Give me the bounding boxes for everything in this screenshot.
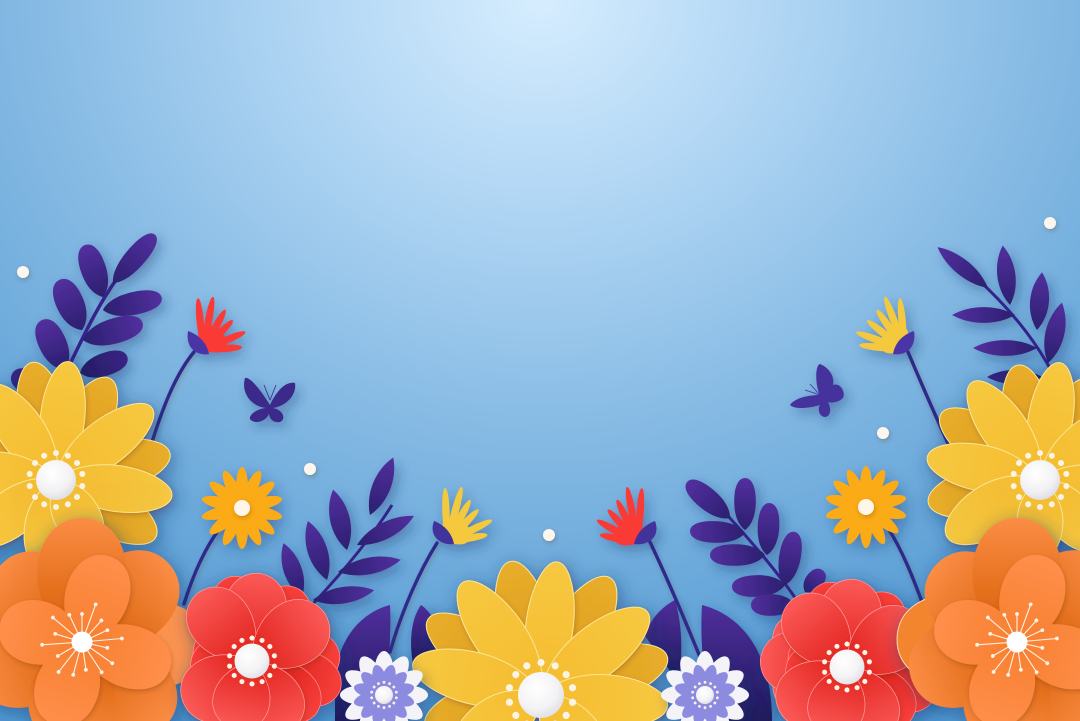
tulip flower: yellow, right	[855, 295, 916, 361]
butterfly: right	[790, 364, 844, 417]
small orange daisy: right	[825, 466, 907, 548]
red flower: left	[168, 570, 349, 721]
white and lavender flower: left	[340, 651, 428, 721]
tulip flower: red, centre	[595, 486, 657, 553]
small orange daisy: left	[201, 467, 283, 549]
floating dots	[17, 217, 1056, 541]
large yellow flower: left	[0, 358, 175, 573]
large yellow flower: right	[923, 359, 1080, 564]
leaf branch: centre right	[680, 474, 830, 616]
orange flower: right	[896, 518, 1080, 721]
leaf branch: centre left	[275, 454, 418, 608]
tulip flower: red, left	[188, 296, 247, 360]
central yellow flower	[407, 556, 675, 721]
leaf branch: top left	[7, 228, 164, 403]
orange flower: left	[0, 518, 209, 721]
butterfly: left	[244, 378, 295, 422]
leaf branch: top right	[933, 241, 1071, 384]
tulip flower: yellow, centre	[433, 486, 494, 552]
flower stems	[152, 352, 951, 662]
white and lavender flower: right	[661, 651, 749, 721]
red flower: right	[758, 576, 944, 721]
big bottom leaves	[335, 600, 772, 721]
